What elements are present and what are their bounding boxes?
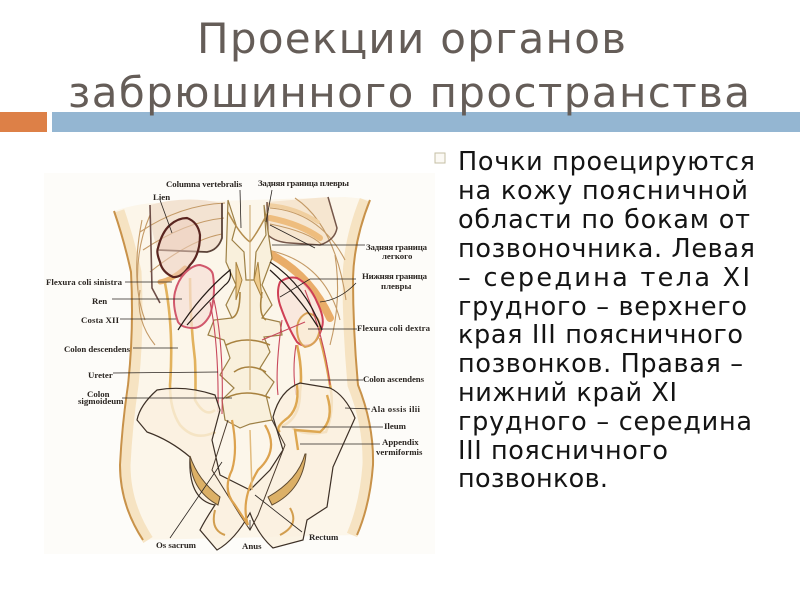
bullet icon [435, 153, 445, 163]
colon ascending [280, 338, 332, 433]
body text: – середина тела XI [458, 263, 750, 293]
diagram labels: sigmoideum [78, 396, 124, 406]
diagram labels: Colon [87, 389, 110, 399]
diagram labels: Lien [153, 192, 170, 202]
diagram background [44, 173, 435, 554]
body text: III поясничного [458, 436, 668, 466]
body text: нижний край XI [458, 378, 677, 408]
left lung field [150, 199, 222, 252]
body text [458, 147, 755, 494]
diagram labels: Costa XII [81, 315, 120, 325]
diagram labels: Ureter [88, 370, 113, 380]
blue accent bar [52, 112, 800, 132]
body text: грудного – середина [458, 407, 752, 437]
rib XII and flexure lines [178, 262, 322, 330]
diagram labels: Ileum [384, 421, 407, 431]
orange accent bar [0, 112, 47, 132]
colon descending [165, 278, 215, 436]
body text: позвонков. [458, 464, 608, 494]
diagram labels: Задняя граница [366, 242, 428, 252]
body text: области по бокам от [458, 205, 750, 235]
torso [114, 197, 373, 540]
body text: на кожу поясничной [458, 176, 748, 206]
title: забрюшинного пространства [68, 68, 750, 117]
diagram labels: Colon ascendens [363, 374, 425, 384]
body text: края III поясничного [458, 320, 743, 350]
diagram labels: Ala ossis ilii [371, 404, 421, 414]
diagram labels: Rectum [309, 532, 339, 542]
right kidney [278, 278, 323, 346]
spleen [157, 218, 200, 277]
ribs [137, 198, 346, 345]
diagram labels: vermiformis [376, 447, 423, 457]
diagram labels: Flexura coli dextra [357, 323, 431, 333]
anatomical diagram [44, 173, 435, 554]
diagram labels [46, 178, 431, 551]
body text: Почки проецируются [458, 147, 755, 177]
title: Проекции органов [197, 14, 626, 63]
diagram labels: Задняя граница плевры [258, 178, 349, 188]
body text: позвонков. Правая – [458, 349, 743, 379]
diagram labels: Os sacrum [156, 540, 197, 550]
pelvis [137, 383, 355, 550]
leader lines [112, 190, 383, 538]
ureters and vessels [210, 290, 330, 414]
left kidney [174, 265, 214, 328]
diagram labels: легкого [382, 251, 413, 261]
diagram labels: Anus [242, 541, 262, 551]
diagram labels: Columna vertebralis [166, 179, 243, 189]
spine [208, 200, 282, 428]
title [68, 14, 750, 117]
diagram labels: Colon descendens [64, 344, 131, 354]
diagram labels: плевры [381, 281, 412, 291]
orange rib bands [160, 205, 330, 318]
diagram labels: Нижняя граница [362, 271, 428, 281]
body text: грудного – верхнего [458, 292, 747, 322]
sacrum and rectum [212, 420, 285, 530]
lung border lines [150, 197, 337, 303]
right lung field [267, 197, 337, 245]
body text: позвоночника. Левая [458, 234, 755, 264]
right colic flexure [297, 313, 320, 347]
diagram labels: Flexura coli sinistra [46, 277, 123, 287]
diagram labels: Appendix [382, 437, 419, 447]
diagram labels: Ren [92, 296, 107, 306]
